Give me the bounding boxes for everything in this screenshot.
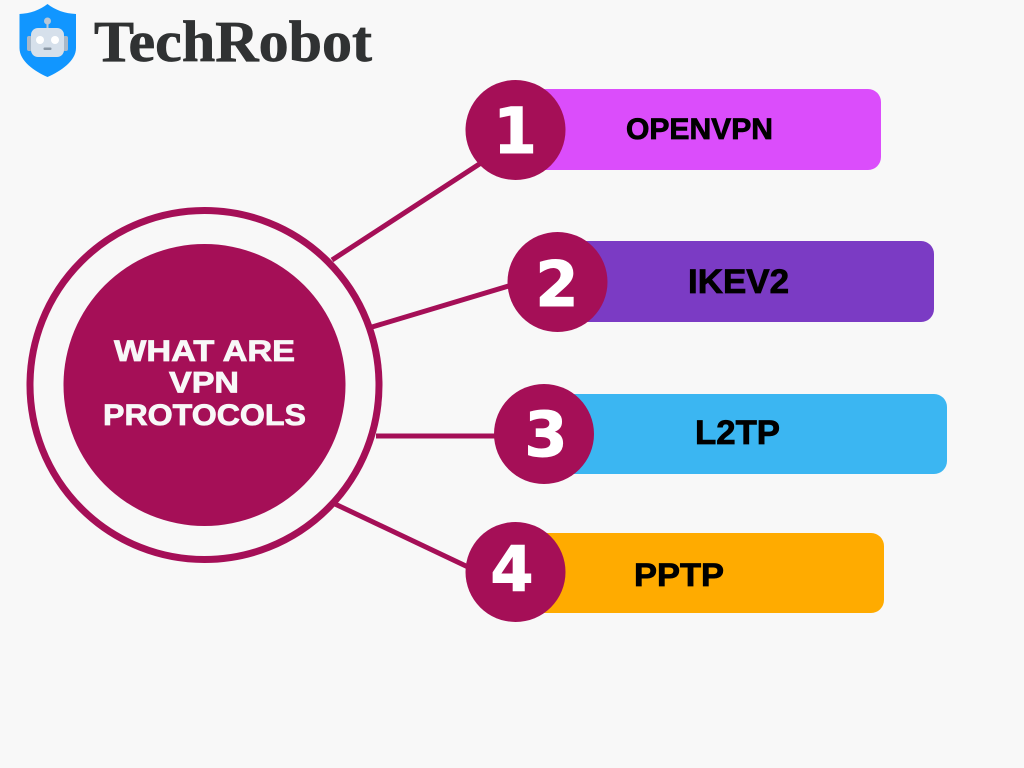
hub inner disc: [64, 244, 346, 526]
connector: hub to 3: [376, 434, 498, 438]
item 2: IKEv2: [508, 232, 934, 332]
icon: robot shield: [20, 4, 76, 77]
item 4: PPTP: [466, 522, 884, 622]
badge 3: [494, 384, 594, 484]
hub title: VPN: [169, 366, 239, 400]
bar 4: [515, 533, 884, 613]
number 2: 2: [535, 248, 579, 321]
label 2: IKEV2: [688, 263, 789, 301]
label 1: OPENVPN: [626, 113, 773, 146]
label 4: PPTP: [634, 557, 724, 593]
logo: TechRobot: [20, 4, 373, 77]
bar 2: [557, 241, 934, 322]
hub title: [103, 335, 306, 432]
bar 3: [544, 394, 947, 474]
number 4: 4: [490, 533, 534, 606]
connector: hub to 1: [332, 161, 484, 260]
connector: hub to 2: [372, 285, 512, 327]
label 3: L2TP: [695, 414, 780, 452]
badge 2: [508, 232, 608, 332]
number 3: 3: [524, 398, 568, 471]
hub outer ring: [30, 210, 379, 560]
item 3: L2TP: [494, 384, 947, 484]
badge 1: [466, 80, 566, 180]
connector: hub to 4: [335, 504, 468, 567]
hub title: WHAT ARE: [114, 335, 295, 368]
number 1: 1: [493, 95, 537, 168]
badge 4: [466, 522, 566, 622]
hub title: PROTOCOLS: [103, 399, 306, 432]
wordmark: TechRobot: [94, 9, 373, 74]
bar 1: [515, 89, 881, 170]
central hub: [30, 210, 379, 560]
item 1: OpenVPN: [466, 80, 881, 180]
